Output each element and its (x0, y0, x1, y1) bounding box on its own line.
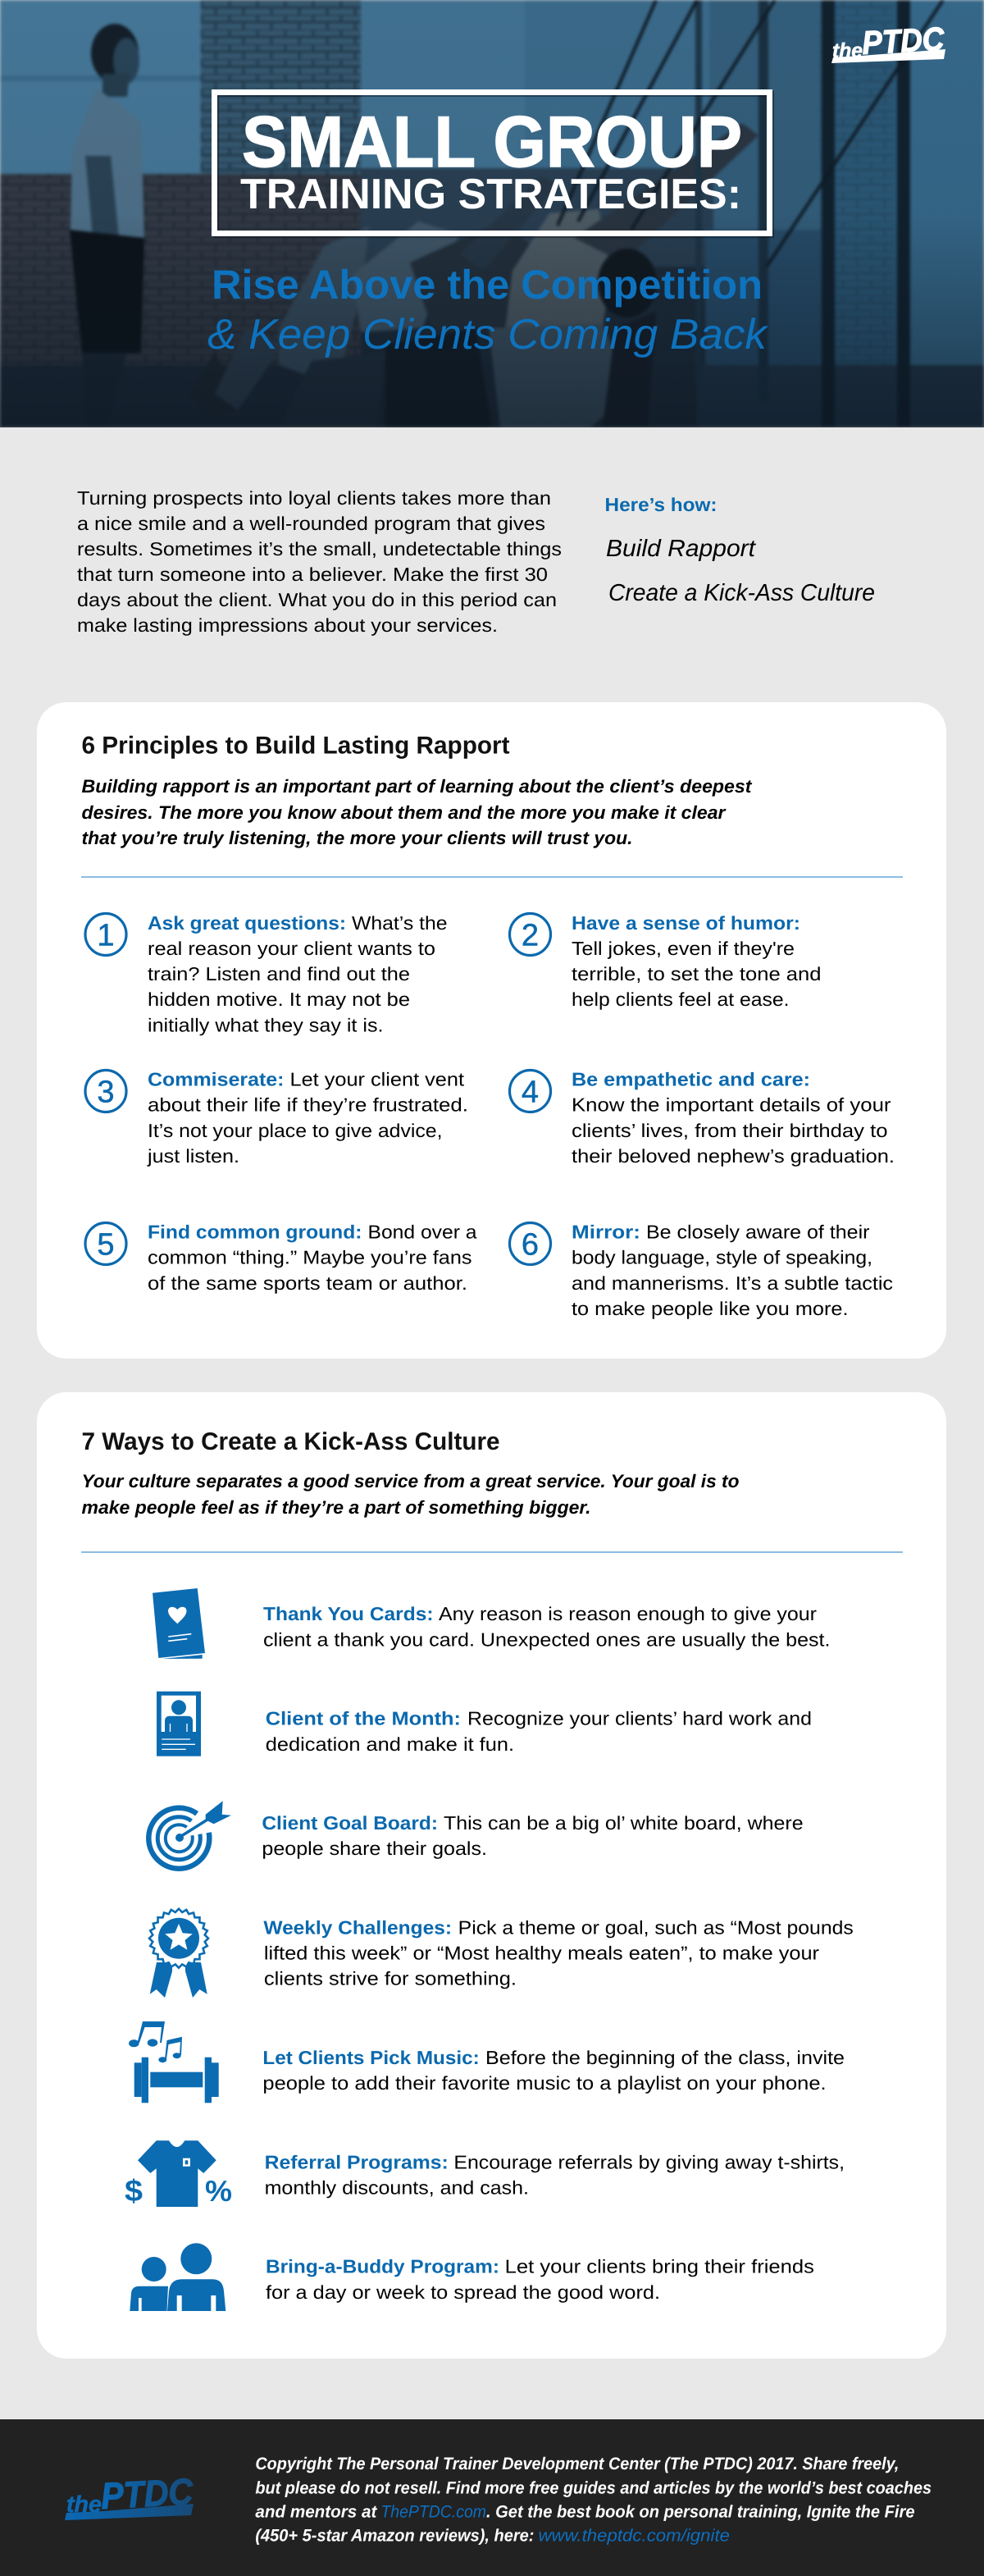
way 3: client goal board: people share their goals. (262, 1838, 487, 1859)
logo: thePTDC blue (65, 2470, 195, 2520)
way 7: bring-a-buddy program: for a day or week to spread the good word. (266, 2281, 660, 2303)
way 6: referral programs: monthly discounts, and cash. (265, 2177, 529, 2199)
principle 2: 2 (522, 919, 539, 953)
intro paragraph: a nice smile and a well-rounded program that gives (77, 513, 545, 534)
principle 6: Be closely aware of their (646, 1221, 870, 1242)
intro paragraph (77, 487, 562, 636)
principle 5: Find common ground: (148, 1221, 362, 1242)
standing trainer (91, 24, 139, 83)
way 1: thank you cards: Thank You Cards: (263, 1603, 433, 1624)
principle 6: to make people like you more. (572, 1298, 848, 1319)
principle 1: What’s the (352, 912, 448, 934)
icon: award ribbon (149, 1909, 208, 1998)
icon: dumbbell with music notes (129, 2021, 219, 2103)
way 7: bring-a-buddy program: Let your clients bring their friends (505, 2256, 814, 2277)
rapport intro text: desires. The more you know about them and the more you make it clear (82, 802, 727, 823)
footer panel (0, 2419, 984, 2576)
way 5: let clients pick music: Let Clients Pick Music: (262, 2047, 480, 2068)
title line 1: SMALL GROUP (242, 101, 742, 182)
principle 5 (85, 1221, 477, 1294)
icon: greeting card (153, 1588, 205, 1659)
principle 3: 3 (97, 1075, 115, 1109)
principle 4 (510, 1068, 895, 1167)
intro paragraph: make lasting impressions about your services. (77, 614, 498, 636)
principle 4: 4 (522, 1075, 539, 1109)
principle 3: Let your client vent (290, 1068, 465, 1089)
principle 2: terrible, to set the tone and (572, 963, 822, 984)
way 5: let clients pick music: people to add their favorite music to a playlist on your phone. (262, 2072, 827, 2094)
principle 1: hidden motive. It may not be (148, 989, 410, 1010)
way 4: weekly challenges: lifted this week” or “Most healthy meals eaten”, to make your (264, 1942, 819, 1963)
heading: 7 ways: 7 Ways to Create a Kick-Ass Culture (82, 1428, 500, 1455)
principle 6 (510, 1221, 893, 1319)
copyright text: and mentors at (255, 2502, 377, 2521)
hero panel (0, 0, 984, 427)
way 2: client of the month: dedication and make it fun. (266, 1733, 514, 1755)
principle 6: and mannerisms. It’s a subtle tactic (572, 1272, 893, 1294)
principle 3 (85, 1068, 468, 1167)
principle 5: common “thing.” Maybe you’re fans (148, 1247, 472, 1268)
way 1: thank you cards: Any reason is reason enough to give your (439, 1603, 817, 1624)
way 4: weekly challenges: Weekly Challenges: (263, 1916, 452, 1938)
subtitle line 2: & Keep Clients Coming Back (207, 311, 769, 359)
principle 3: It’s not your place to give advice, (148, 1120, 443, 1141)
principle 2: Tell jokes, even if they're (572, 938, 795, 959)
copyright text (255, 2455, 932, 2546)
icon: t-shirt with dollar and percent: $ (125, 2174, 143, 2208)
way 1: thank you cards (153, 1588, 830, 1659)
intro paragraph: that turn someone into a believer. Make the first 30 (77, 564, 548, 585)
way 4: weekly challenges (149, 1909, 854, 1998)
icon: t-shirt with dollar and percent (125, 2140, 232, 2208)
principle 6: Mirror: (572, 1221, 640, 1242)
principle 3: just listen. (147, 1145, 239, 1167)
culture intro text: Your culture separates a good service from a great service. Your goal is to (82, 1471, 740, 1491)
copyright text: but please do not resell. Find more free guides and articles by the world’s best coaches (255, 2478, 932, 2497)
copyright text: ThePTDC.com (380, 2502, 486, 2521)
icon: portrait card (157, 1692, 201, 1756)
title line 2: TRAINING STRATEGIES: (240, 171, 741, 218)
panel: culture ways (37, 1392, 946, 2359)
icon: two people (130, 2243, 226, 2311)
way 5: let clients pick music: Before the beginning of the class, invite (485, 2047, 845, 2068)
principle 2: Have a sense of humor: (572, 912, 800, 934)
panel: rapport principles (37, 702, 946, 1359)
principle 4: Be empathetic and care: (572, 1068, 810, 1089)
heading: 6 principles: 6 Principles to Build Lasting Rapport (82, 732, 510, 760)
way 6: referral programs (125, 2140, 845, 2208)
title box (215, 92, 771, 235)
way 3: client goal board (148, 1801, 804, 1869)
principle 4: their beloved nephew’s graduation. (572, 1145, 895, 1167)
hero photo: gym scene (0, 0, 984, 427)
here's how list (605, 494, 875, 606)
intro paragraph: days about the client. What you do in this period can (77, 589, 557, 610)
way 2: client of the month (157, 1692, 812, 1756)
logo: thePTDC blue: PTDC (100, 2470, 195, 2517)
way 2: client of the month: Recognize your clients’ hard work and (467, 1708, 812, 1729)
principle 1: train? Listen and find out the (148, 963, 410, 984)
here's how list: Create a Kick-Ass Culture (608, 580, 875, 606)
culture intro text: make people feel as if they’re a part of something bigger. (82, 1497, 590, 1518)
icon: t-shirt with dollar and percent: % (205, 2174, 232, 2208)
way 6: referral programs: Referral Programs: (265, 2151, 449, 2172)
subtitle line 1: Rise Above the Competition (212, 262, 763, 308)
icon: target with arrow (148, 1801, 231, 1869)
way 4: weekly challenges: clients strive for something. (264, 1967, 517, 1989)
logo: thePTDC white: the (832, 39, 863, 62)
way 4: weekly challenges: Pick a theme or goal, such as “Most pounds (458, 1916, 854, 1938)
way 7: bring-a-buddy program: Bring-a-Buddy Program: (266, 2256, 499, 2277)
here's how list: Build Rapport (606, 536, 757, 562)
way 7: bring-a-buddy program (130, 2243, 814, 2311)
copyright text: Copyright The Personal Trainer Development Center (The PTDC) 2017. Share freely, (255, 2455, 899, 2473)
intro paragraph: results. Sometimes it’s the small, undetectable things (77, 538, 562, 560)
way 6: referral programs: Encourage referrals by giving away t-shirts, (453, 2151, 845, 2172)
here's how list: Here’s how: (605, 494, 717, 515)
logo: thePTDC white (831, 26, 945, 63)
principle 1 (85, 912, 448, 1035)
rapport intro text: that you’re truly listening, the more your clients will trust you. (82, 828, 633, 848)
dark gradient overlay (0, 0, 984, 427)
rapport intro text (82, 776, 753, 848)
principle 1: initially what they say it is. (148, 1014, 384, 1035)
dark pillars (695, 0, 702, 386)
copyright text: . Get the best book on personal training, Ignite the Fire (486, 2502, 915, 2521)
way 3: client goal board: Client Goal Board: (262, 1812, 438, 1834)
principle 5: Bond over a (367, 1221, 477, 1242)
principle 2 (510, 912, 822, 1010)
culture intro text (82, 1471, 740, 1518)
way 5: let clients pick music (129, 2021, 845, 2103)
principle 1: 1 (97, 919, 115, 953)
principle 3: about their life if they’re frustrated. (148, 1094, 468, 1116)
principle 1: real reason your client wants to (148, 938, 435, 959)
intro paragraph: Turning prospects into loyal clients takes more than (77, 487, 551, 509)
way 1: thank you cards: client a thank you card. Unexpected ones are usually the best. (263, 1629, 830, 1651)
principle 4: Know the important details of your (572, 1094, 891, 1116)
suspension straps (558, 0, 943, 267)
principle 5: of the same sports team or author. (148, 1272, 467, 1294)
logo: thePTDC blue: the (66, 2492, 102, 2517)
group of bending clients (279, 226, 369, 386)
principle 2: help clients feel at ease. (572, 989, 789, 1010)
copyright text: www.theptdc.com/ignite (538, 2527, 730, 2546)
principle 6: body language, style of speaking, (572, 1247, 872, 1268)
principle 4: clients’ lives, from their birthday to (572, 1120, 887, 1141)
copyright text: (450+ 5-star Amazon reviews), here: (255, 2527, 534, 2546)
way 2: client of the month: Client of the Month: (266, 1708, 461, 1729)
principle 5: 5 (97, 1227, 115, 1262)
principle 1: Ask great questions: (148, 912, 346, 934)
principle 6: 6 (522, 1227, 539, 1262)
principle 3: Commiserate: (148, 1068, 284, 1089)
way 3: client goal board: This can be a big ol’ white board, where (444, 1812, 804, 1834)
logo: thePTDC white: PTDC (861, 21, 945, 62)
rapport intro text: Building rapport is an important part of learning about the client’s deepest (82, 776, 753, 797)
